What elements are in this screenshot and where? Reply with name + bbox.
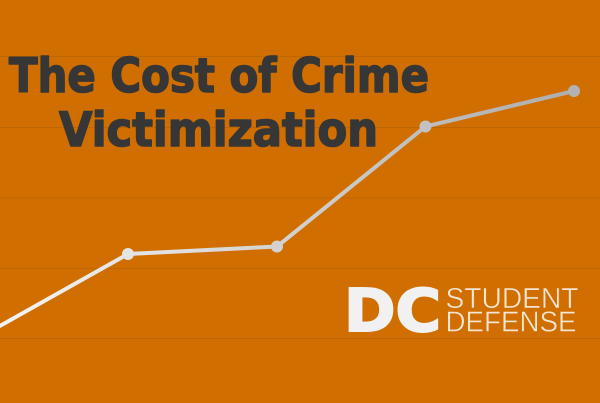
data point 4 xyxy=(568,85,580,97)
title: Victimization xyxy=(59,103,378,158)
data point 2 xyxy=(271,240,283,252)
logo wordmark: Defense: DEFENSE xyxy=(446,306,576,338)
logo wordmark: Student: STUDENT xyxy=(446,283,579,315)
line chart xyxy=(0,85,580,327)
data point 1 xyxy=(122,248,134,260)
logo mark: DC: DC xyxy=(344,276,441,345)
title xyxy=(9,49,429,158)
logo: DC Student Defense xyxy=(344,276,579,345)
title: The Cost of Crime xyxy=(9,49,429,104)
data point 3 xyxy=(420,120,432,132)
trend line xyxy=(0,91,574,327)
